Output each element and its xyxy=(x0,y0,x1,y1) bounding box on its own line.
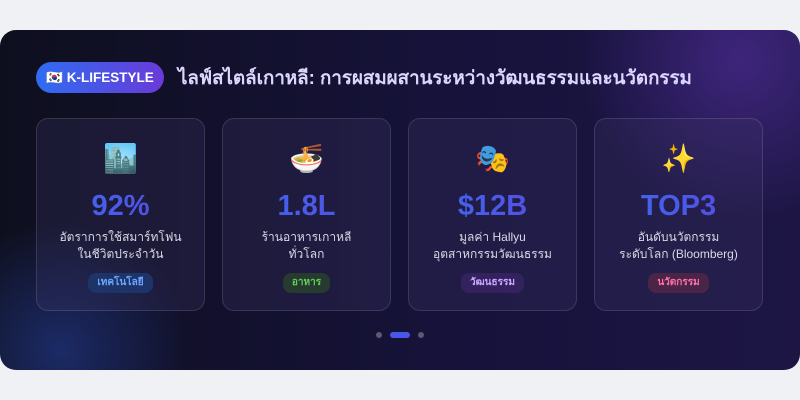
card: culture: $12B xyxy=(458,190,527,222)
card: food: ทั่วโลก xyxy=(289,247,324,261)
card: innovation: ระดับโลก (Bloomberg) xyxy=(619,247,738,261)
card: culture: 🎭 xyxy=(475,143,510,174)
card: food: 1.8L xyxy=(277,190,336,222)
card: innovation: นวัตกรรม xyxy=(657,277,700,288)
card: technology: ในชีวิตประจำวัน xyxy=(78,247,163,261)
card: technology: 🏙️ xyxy=(103,143,138,174)
card: culture: มูลค่า Hallyu xyxy=(459,230,526,244)
card: culture: อุตสาหกรรมวัฒนธรรม xyxy=(433,247,552,261)
card: food: 🍜 xyxy=(289,143,324,174)
card: innovation xyxy=(594,118,763,311)
badge: K-LIFESTYLE: 🇰🇷 K-LIFESTYLE xyxy=(46,70,154,85)
card: food: ร้านอาหารเกาหลี xyxy=(262,230,351,244)
card: technology xyxy=(36,118,205,311)
card: technology: เทคโนโลยี xyxy=(97,277,144,288)
pagination dots xyxy=(376,332,424,338)
badge: K-LIFESTYLE xyxy=(36,62,164,93)
card: food xyxy=(222,118,391,311)
card: innovation: ✨ xyxy=(661,143,696,174)
title: ไลฟ์สไตล์เกาหลี: การผสมผสานระหว่างวัฒนธรรมและนวัตกรรม xyxy=(178,68,692,89)
card: culture xyxy=(408,118,577,311)
card: innovation: อันดับนวัตกรรม xyxy=(638,230,719,244)
card: technology: 92% xyxy=(91,190,150,222)
card: culture: วัฒนธรรม xyxy=(470,277,515,288)
card: food: อาหาร xyxy=(292,277,321,288)
card: technology: อัตราการใช้สมาร์ทโฟน xyxy=(59,230,182,244)
card: innovation: TOP3 xyxy=(641,190,716,222)
